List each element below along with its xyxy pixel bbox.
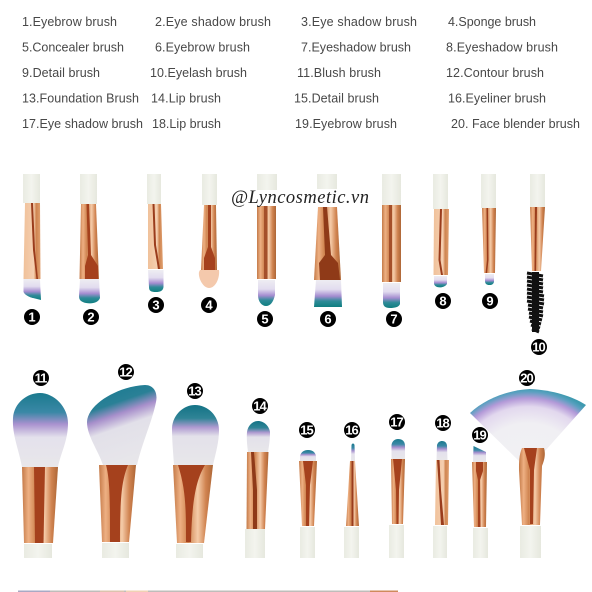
brush 1	[23, 174, 41, 325]
brush name list: 11.Blush brush	[297, 66, 381, 80]
brush 1: 1	[28, 310, 36, 324]
brush 12: 12	[119, 364, 132, 380]
bottom image edge	[18, 590, 398, 592]
brush name list: 2.Eye shadow brush	[155, 15, 271, 29]
brush 5: 5	[261, 312, 269, 326]
brush 3	[147, 174, 164, 313]
brush 10	[527, 174, 547, 355]
brush 19	[472, 427, 488, 558]
brush name list: 9.Detail brush	[22, 66, 100, 80]
brush 14: 14	[253, 398, 267, 414]
brush name list: 7.Eyeshadow brush	[301, 40, 411, 54]
brush 6: 6	[324, 312, 332, 326]
brush 8: 8	[439, 294, 447, 308]
brush 7: 7	[390, 312, 398, 326]
brush name list	[22, 15, 580, 131]
brush 15	[299, 422, 317, 558]
brush 11	[13, 370, 68, 558]
brush name list: 15.Detail brush	[294, 92, 379, 106]
brush 15: 15	[300, 422, 313, 438]
brush name list: 20. Face blender brush	[451, 117, 580, 131]
brush name list: 1.Eyebrow brush	[22, 15, 117, 29]
brush name list: 8.Eyeshadow brush	[446, 40, 558, 54]
watermark: @Lyncosmetic.vn	[231, 188, 369, 208]
brush name list: 17.Eye shadow brush	[22, 117, 143, 131]
brush 8	[433, 174, 451, 309]
brush name list: 10.Eyelash brush	[150, 66, 247, 80]
brush 2: 2	[87, 310, 95, 324]
brush 13	[172, 383, 219, 558]
brush name list: 18.Lip brush	[152, 117, 221, 131]
brush 7	[382, 174, 402, 327]
brush 18: 18	[436, 416, 449, 430]
brush name list: 19.Eyebrow brush	[295, 117, 397, 131]
brush 20: 20	[520, 370, 533, 386]
brush 4: 4	[205, 298, 213, 312]
brush name list: 3.Eye shadow brush	[301, 15, 417, 29]
brush 6	[314, 174, 342, 327]
brush 16: 16	[345, 422, 358, 438]
brush name list: 14.Lip brush	[151, 92, 221, 106]
brush 19: 19	[473, 428, 486, 442]
brush name list: 4.Sponge brush	[448, 15, 536, 29]
brush 10: 10	[532, 340, 545, 354]
brush 13: 13	[188, 384, 201, 398]
brush name list: 16.Eyeliner brush	[448, 92, 546, 106]
brush 4	[199, 174, 219, 313]
brush 9	[481, 174, 498, 309]
brush name list: 13.Foundation Brush	[22, 92, 139, 106]
brush 3: 3	[152, 298, 160, 312]
brush 5	[257, 174, 277, 327]
brush 17	[389, 414, 405, 558]
brush 20	[470, 370, 586, 558]
brush 18	[433, 415, 451, 558]
brush 14	[245, 398, 270, 558]
brush 11: 11	[35, 370, 47, 386]
brush name list: 5.Concealer brush	[22, 40, 124, 54]
brush 16	[344, 422, 360, 558]
brush 12	[87, 364, 157, 558]
brush 2	[79, 174, 100, 325]
brush 17: 17	[390, 414, 403, 430]
brush name list: 12.Contour brush	[446, 66, 544, 80]
brush 9: 9	[486, 294, 494, 308]
brush name list: 6.Eyebrow brush	[155, 40, 250, 54]
